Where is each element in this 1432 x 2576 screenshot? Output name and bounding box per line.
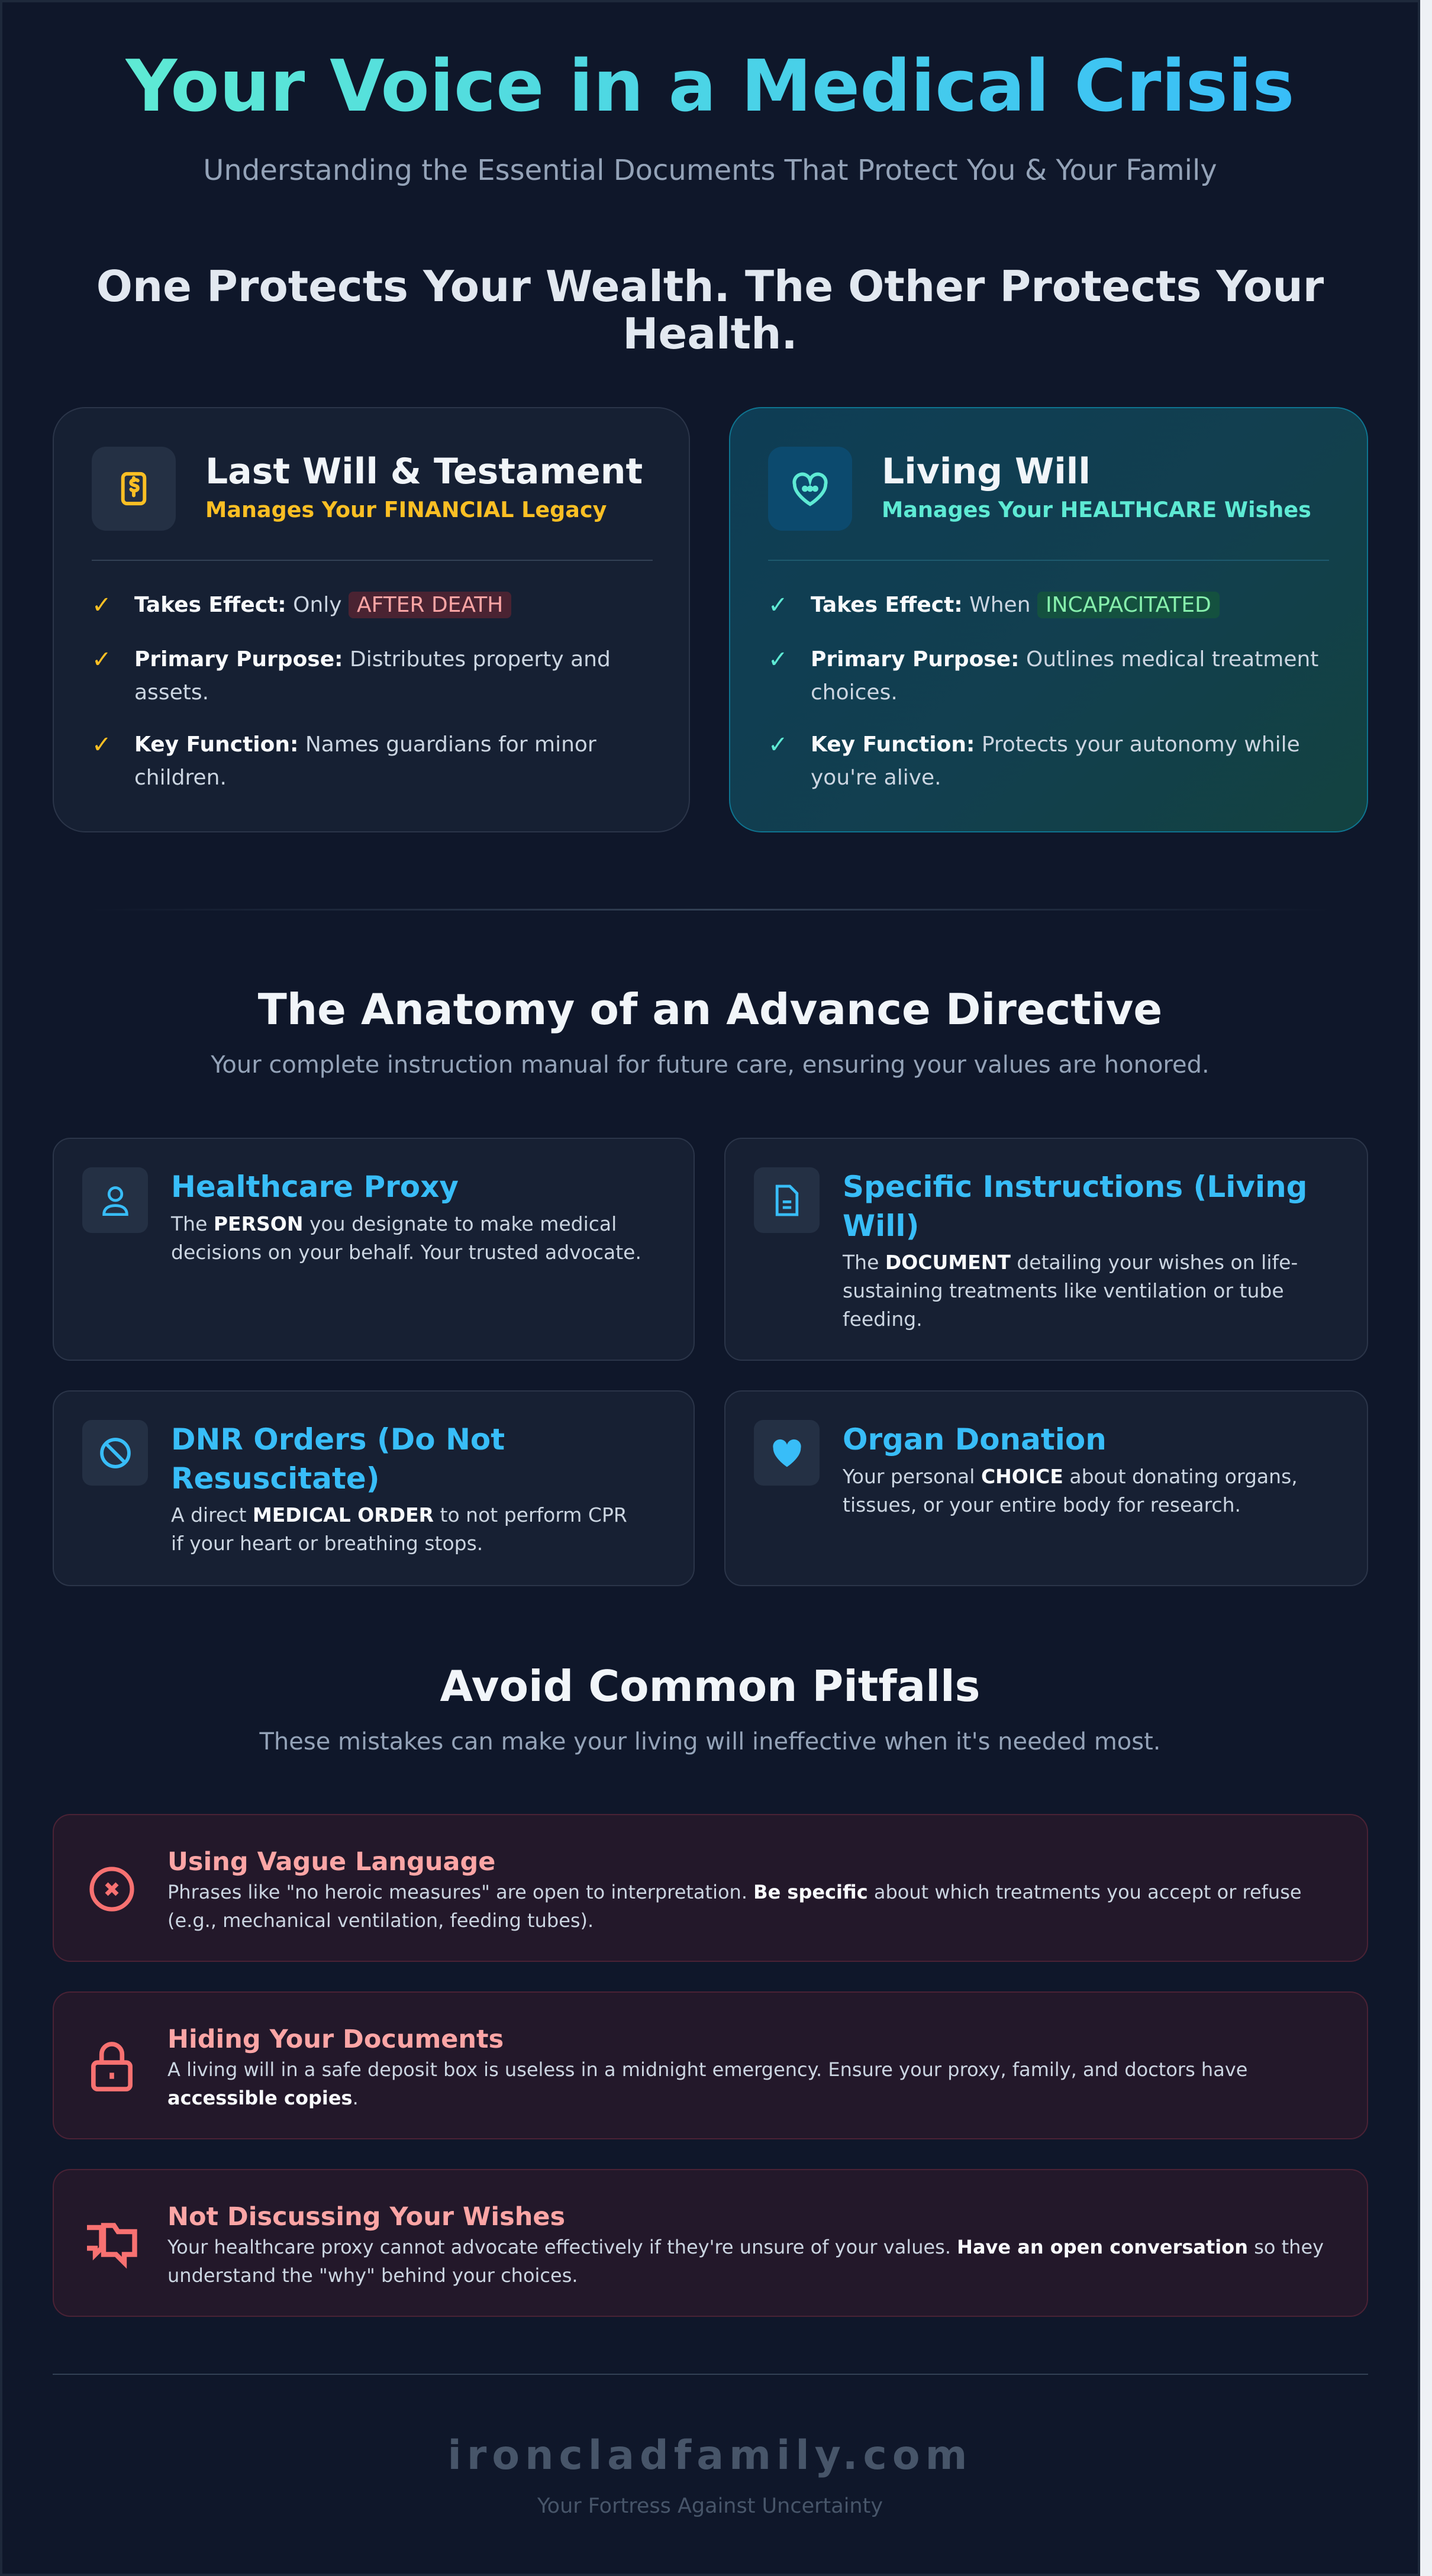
list item: purpose: Primary Purpose: Distributes property and assets. bbox=[134, 647, 611, 705]
panel: last will: ✓ bbox=[92, 592, 112, 619]
panel: organ donation bbox=[724, 1390, 1368, 1586]
pitfall: vague language: Phrases like "no heroic measures" are open to interpretation. Be specific about which treatments you accept or refuse (e.g., mechanical ventilation, feeding tubes). bbox=[167, 1881, 1302, 1932]
panel: last will: ✓ bbox=[92, 646, 112, 673]
icon: money document bbox=[92, 447, 176, 531]
panel: living will: ✓ bbox=[768, 731, 788, 758]
panel: living will bbox=[729, 407, 1368, 832]
icon: heart bbox=[754, 1420, 820, 1486]
footer tagline: Your Fortress Against Uncertainty bbox=[537, 2494, 883, 2518]
pitfall: not discussing: Your healthcare proxy cannot advocate effectively if they're unsure of your values. Have an open conversation so they understand the "why" behind your choices. bbox=[167, 2236, 1324, 2287]
panel: organ donation: Your personal CHOICE about donating organs, tissues, or your entire body for research. bbox=[843, 1465, 1298, 1516]
list item: purpose: Primary Purpose: Outlines medical treatment choices. bbox=[811, 647, 1318, 705]
panel: healthcare proxy: The PERSON you designate to make medical decisions on your behalf. Your trusted advocate. bbox=[171, 1212, 641, 1264]
panel: healthcare proxy: Healthcare Proxy bbox=[171, 1170, 459, 1204]
icon: prohibited bbox=[82, 1420, 148, 1486]
card subtitle: Manages Your HEALTHCARE Wishes bbox=[882, 497, 1311, 522]
title: Your Voice in a Medical Crisis bbox=[125, 46, 1295, 128]
pitfall: not discussing: Not Discussing Your Wishes bbox=[167, 2202, 565, 2232]
pitfall: vague language: Using Vague Language bbox=[167, 1847, 495, 1877]
footer brand: ironcladfamily.com bbox=[448, 2432, 972, 2479]
card subtitle: Manages Your FINANCIAL Legacy bbox=[205, 497, 607, 522]
panel: living will: ✓ bbox=[768, 646, 788, 673]
list item: takes effect: Takes Effect: Only AFTER DEATH bbox=[134, 593, 503, 617]
panel: last will bbox=[53, 407, 690, 832]
section heading: anatomy: The Anatomy of an Advance Directive bbox=[258, 984, 1162, 1034]
pitfall: hiding documents bbox=[53, 1991, 1368, 2139]
subtitle: Understanding the Essential Documents That Protect You & Your Family bbox=[203, 154, 1217, 187]
list item: key function: Key Function: Names guardians for minor children. bbox=[134, 732, 596, 790]
pitfall: not discussing bbox=[53, 2169, 1368, 2317]
panel: organ donation: Organ Donation bbox=[843, 1422, 1107, 1457]
section heading: wealth vs health: One Protects Your Wealth. The Other Protects Your Health. bbox=[96, 262, 1324, 359]
section heading: pitfalls: Avoid Common Pitfalls bbox=[440, 1661, 980, 1711]
icon: person bbox=[82, 1167, 148, 1233]
icon: heart chat bbox=[768, 447, 852, 531]
card title: Last Will & Testament bbox=[205, 451, 643, 492]
panel: specific instructions: The DOCUMENT detailing your wishes on life-sustaining treatments like ventilation or tube feeding. bbox=[843, 1251, 1298, 1331]
icon: x circle bbox=[89, 1867, 134, 1912]
icon: speech bubbles bbox=[87, 2223, 137, 2268]
list item: takes effect: Takes Effect: When INCAPACITATED bbox=[811, 593, 1211, 617]
panel: living will: ✓ bbox=[768, 592, 788, 619]
panel: DNR orders: DNR Orders (Do Not Resuscitate) bbox=[171, 1422, 505, 1496]
pitfall: hiding documents: Hiding Your Documents bbox=[167, 2025, 504, 2054]
anatomy subtitle: Your complete instruction manual for future care, ensuring your values are honored. bbox=[211, 1051, 1210, 1079]
panel: specific instructions: Specific Instructions (Living Will) bbox=[843, 1170, 1307, 1243]
icon: document bbox=[754, 1167, 820, 1233]
pitfalls subtitle: These mistakes can make your living will ineffective when it's needed most. bbox=[259, 1728, 1161, 1755]
panel: healthcare proxy bbox=[53, 1138, 695, 1361]
panel: specific instructions bbox=[724, 1138, 1368, 1361]
panel: DNR orders bbox=[53, 1390, 695, 1586]
panel: DNR orders: A direct MEDICAL ORDER to not perform CPR if your heart or breathing stops. bbox=[171, 1503, 627, 1555]
pitfall: hiding documents: A living will in a safe deposit box is useless in a midnight emergency. Ensure your proxy, family, and doctors have accessible copies. bbox=[167, 2058, 1247, 2109]
panel: last will: ✓ bbox=[92, 731, 112, 758]
card title: Living Will bbox=[882, 451, 1091, 492]
icon: lock bbox=[91, 2042, 133, 2091]
pitfall: vague language bbox=[53, 1814, 1368, 1962]
list item: key function: Key Function: Protects your autonomy while you're alive. bbox=[811, 732, 1300, 790]
